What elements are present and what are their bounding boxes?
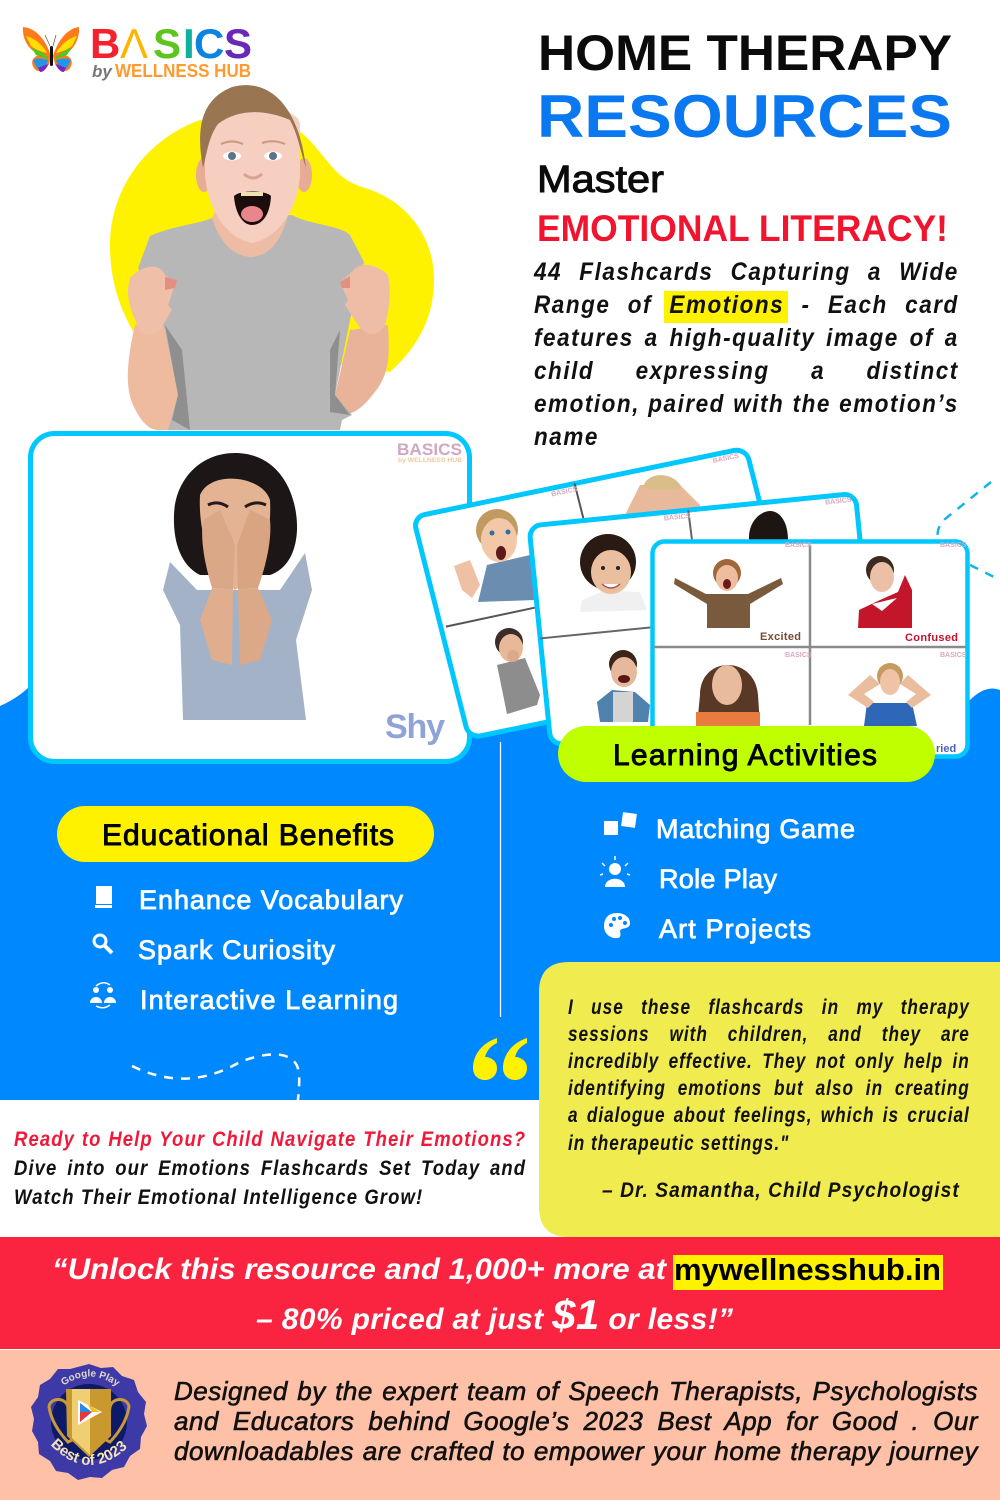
ears [196,158,212,192]
child scared girl [848,663,931,726]
child hands on head [625,475,700,525]
text block: call to action: Dive into our Emotions Flashcards Set Today and [14,1157,526,1180]
text block: description: Range of Emotions - Each card [534,291,959,319]
text block: call to action: Watch Their Emotional Intelligence Grow! [14,1186,423,1209]
Spark Curiosity: Spark Curiosity [138,935,336,965]
icon: book [95,886,112,908]
mini card logos [785,542,967,659]
flashcard middle sheet: BASICS [664,513,691,523]
text block: testimonial: I use these flashcards in my therapy [568,996,970,1019]
child excited [674,559,783,628]
icon: quotation mark [473,1038,527,1080]
child dark hair partially hidden [749,511,788,540]
text block: testimonial: sessions with children, and they are [568,1023,970,1046]
icon: butterfly [23,27,79,72]
Interactive Learning: Interactive Learning [140,985,398,1015]
logo wordmark: Λ [120,20,148,67]
band: red promo [0,1237,1000,1349]
child covering mouth [495,628,540,714]
text block: testimonial: in therapeutic settings." [568,1132,789,1155]
highlight: website [673,1255,943,1290]
decorative dashed curve [132,1054,299,1125]
forearm right [335,325,389,415]
icon: cards [604,812,637,835]
flashcard middle sheet [529,493,877,745]
child curly hair smiling [580,534,647,612]
neck [212,190,288,257]
website: mywellnesshub.in [674,1252,941,1287]
text block: description: features a high-quality image of a [534,324,959,352]
mini card logos: BASICS [940,652,967,659]
fists [128,267,175,335]
text block: description: name [534,423,599,451]
mini card logos: BASICS [785,652,812,659]
icon: people exchange [90,983,116,1008]
logo wordmark: B [90,20,120,67]
label Confused: Confused [905,632,958,644]
label Shy: Shy [385,708,445,746]
arms [200,588,233,665]
logo byline brand: WELLNESS HUB [115,61,251,81]
logo wordmark: C [194,20,224,67]
text block: testimonial: incredibly effective. They not only help in [568,1050,970,1073]
child angry [597,650,650,722]
heading Educational Benefits: Educational Benefits [102,819,394,852]
text block: call to action [14,1128,526,1209]
logo wordmark: I [183,20,195,67]
flashcard back sheet: BASICS [551,486,578,498]
blue background [0,686,1000,1100]
flashcard back sheet [413,446,802,740]
shirt [138,215,364,430]
text block: description: emotion, paired with the emotion’s [534,390,959,418]
icon: magnifier [94,935,112,953]
logo byline: by [92,62,113,81]
Enhance Vocabulary: Enhance Vocabulary [139,885,404,915]
eyes [223,152,241,160]
subtitle Emotional Literacy: EMOTIONAL LITERACY! [537,208,948,249]
heading Learning Activities: Learning Activities [613,739,877,772]
Role Play: Role Play [659,864,778,894]
text block: description: child expressing a distinct [534,357,959,385]
text block: credentials [174,1376,980,1466]
promo line two: – 80% priced at just $1 or less!” [256,1291,733,1338]
hair [200,85,306,168]
text block: testimonial: a dialogue about feelings, which is crucial [568,1104,970,1127]
forearm left [128,325,178,430]
flashcard middle sheet: BASICS [825,497,852,506]
text block: credentials: downloadables are crafted to empower your home therapy journey [174,1436,978,1466]
badge bottom text: Best of 2023 [51,1438,126,1465]
pill: Learning Activities [558,726,935,782]
text block: testimonial: identifying emotions but also in creating [568,1077,970,1100]
decorative yellow blob [110,120,434,372]
icon: role play spotlight [600,856,630,887]
flashcard front sheet [652,542,968,756]
list: learning activities [600,812,855,944]
face [205,106,300,243]
highlight: Emotions [664,291,788,323]
girl photo illustration [163,453,312,720]
text block: description [534,258,959,451]
text block: testimonial: – Dr. Samantha, Child Psychologist [602,1179,960,1202]
flashcard back sheet: BASICS [712,453,740,465]
child surprised [454,509,535,602]
hands over mouth [202,510,235,590]
list: educational benefits [90,885,404,1015]
badge: Google Play Best of 2023 [31,1364,147,1480]
logo wordmark: S [153,20,181,67]
boy photo illustration [128,85,390,430]
card logo byline: by WELLNESS HUB [398,458,463,464]
text block: call to action: Ready to Help Your Child Navigate Their Emotions? [14,1128,526,1151]
logo [23,20,252,81]
Matching Game: Matching Game [656,814,855,844]
text block: description: 44 Flashcards Capturing a Wide [534,258,959,286]
label Excited: Excited [760,631,801,643]
icon: palette [604,913,630,938]
label Worried partial: ried [936,743,956,755]
title HOME THERAPY: HOME THERAPY [538,25,952,81]
Art Projects: Art Projects [659,914,811,944]
divider [500,742,502,1017]
child worried girl [696,665,760,726]
mini card logos: BASICS [785,542,812,549]
panel: main flashcard Shy [30,434,470,762]
logo wordmark: S [224,20,252,67]
panel: bottom-left call to action background [0,1100,540,1237]
child confused [858,556,912,628]
badge top text: Google Play [61,1369,120,1386]
title RESOURCES: RESOURCES [537,83,952,150]
panel: testimonial [539,962,1000,1237]
text block: testimonial [568,996,970,1202]
text block: credentials: Designed by the expert team of Speech Therapists, Psychologists [174,1376,978,1406]
card logo small: BASICS [397,441,462,459]
subtitle Master: Master [537,159,664,201]
mouth [234,192,271,225]
decorative dashed line top right [938,482,996,578]
pill: Educational Benefits [57,806,434,862]
mini card logos: BASICS [940,542,967,549]
text block: credentials: and Educators behind Google’s 2023 Best App for Good . Our [174,1406,978,1436]
promo line one: “Unlock this resource and 1,000+ more at [52,1253,668,1286]
band: credentials [0,1350,1000,1500]
